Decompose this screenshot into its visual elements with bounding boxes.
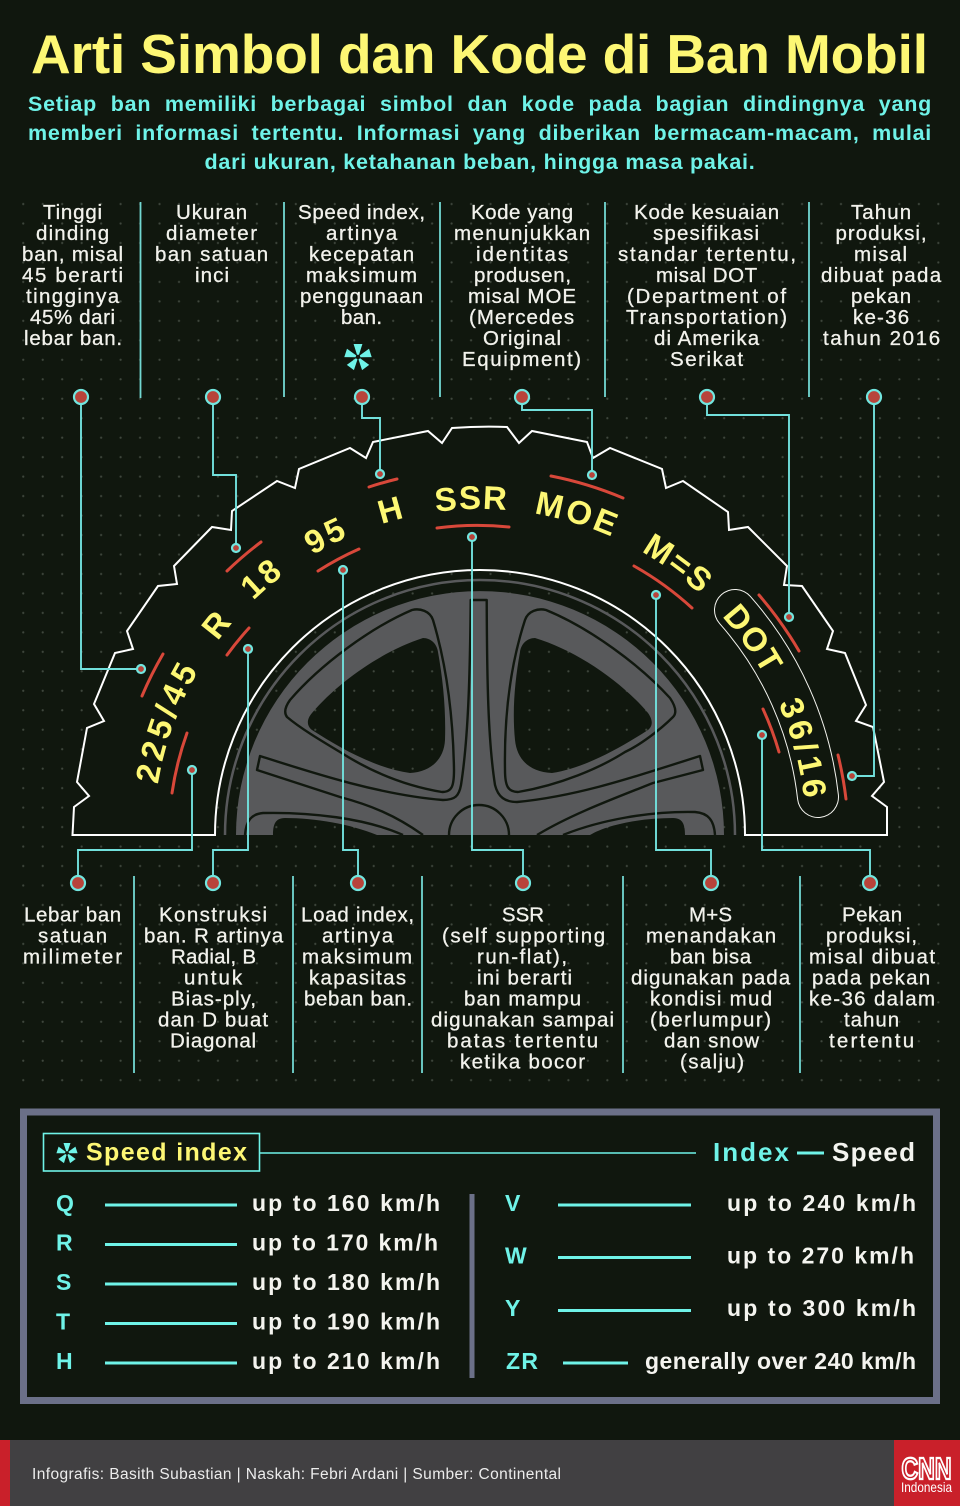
connector pins [71, 390, 881, 890]
top text: wall height: tingginya [26, 285, 120, 308]
right speed rows: Y [505, 1295, 520, 1321]
bottom text: SSR: SSR [502, 904, 544, 926]
bottom text: SSR [431, 904, 615, 1074]
bottom text: M+S: menandakan [646, 924, 777, 948]
bottom text: M+S: digunakan pada [631, 966, 791, 990]
bottom text: SSR: run-flat), [477, 946, 568, 968]
bottom text: M+S: (salju) [680, 1050, 745, 1074]
column divider [470, 1194, 474, 1378]
left speed rows: R [56, 1230, 73, 1256]
left speed rows: up to 160 km/h [252, 1190, 440, 1216]
left speed rows: up to 180 km/h [252, 1269, 440, 1295]
right speed rows: up to 300 km/h [727, 1295, 916, 1321]
bottom text: load index: beban ban. [304, 988, 413, 1010]
left speed rows [56, 1190, 440, 1374]
top text: production year: Tahun [851, 201, 912, 224]
bottom text: production week: ke-36 dalam [809, 988, 936, 1010]
tire sidewall codes: H [378, 496, 402, 524]
left speed rows: S [56, 1269, 71, 1295]
bottom text: load index [301, 904, 415, 1010]
bottom text: SSR: digunakan sampai [431, 1008, 615, 1032]
left speed rows: up to 210 km/h [252, 1348, 440, 1374]
top text: speed index: maksimum [306, 264, 418, 287]
bottom text: width: Lebar ban [24, 904, 122, 926]
top text: wall height: ban, misal [22, 243, 124, 266]
top text: DOT: Transportation) [626, 306, 788, 329]
column legend [713, 1137, 915, 1167]
top text: manufacturer code: Kode yang [471, 201, 574, 224]
top text: production year: tahun 2016 [823, 327, 941, 350]
top text: DOT: Kode kesuaian [634, 201, 780, 224]
top text: manufacturer code: (Mercedes [469, 306, 575, 329]
top text: speed index: Speed index, [298, 201, 426, 224]
top text: manufacturer code: misal MOE [468, 285, 577, 308]
logo: CNN Indonesia [894, 1440, 960, 1506]
right speed rows [505, 1190, 916, 1374]
tire sidewall codes: M=S [643, 533, 711, 591]
footer credits: Infografis: Basith Subastian | Naskah: Febri Ardani | Sumber: Continental [32, 1466, 561, 1483]
top text: production year: produksi, [836, 222, 928, 245]
top text: wall height: lebar ban. [24, 327, 123, 350]
speed index heading [44, 1134, 260, 1171]
top text: speed index [298, 201, 426, 329]
bottom text: production week: produksi, [826, 924, 918, 948]
bottom text: SSR: ketika bocor [460, 1050, 586, 1074]
left speed rows: up to 190 km/h [252, 1308, 440, 1334]
bottom connector lines [78, 537, 870, 883]
intro line 2: memberi informasi tertentu. Informasi yang diberikan bermacam-macam, mulai [28, 121, 932, 145]
panel: speed index table [24, 1112, 936, 1400]
top text: wall height: 45 berarti [22, 264, 124, 287]
top connector lines [81, 397, 874, 776]
speed index heading: Speed index [86, 1138, 247, 1166]
top text: DOT: misal DOT [656, 264, 758, 287]
bottom text: M+S: dan snow [664, 1030, 760, 1052]
bottom text: width: milimeter [23, 946, 123, 968]
bottom text: construction: dan D buat [158, 1008, 269, 1032]
bottom text: SSR: ini berarti [477, 966, 573, 990]
tire sidewall codes: SSR [436, 486, 506, 512]
bottom text: production week [809, 904, 936, 1052]
bottom text: production week: pada pekan [812, 966, 931, 990]
top text: manufacturer code [454, 201, 591, 371]
bottom text: SSR: ban mampu [464, 988, 582, 1010]
bottom text: M+S: (berlumpur) [650, 1008, 772, 1032]
bottom text: construction: Bias-ply, [171, 988, 257, 1010]
column legend: Speed [832, 1137, 915, 1167]
left speed rows: H [56, 1348, 73, 1374]
bottom text: load index: maksimum [302, 946, 413, 968]
red marker arcs [142, 476, 846, 799]
bottom text: SSR: batas tertentu [447, 1030, 599, 1052]
top text: production year: misal [854, 243, 908, 266]
tire sidewall codes [136, 486, 826, 796]
bottom text: production week: tahun [844, 1008, 900, 1032]
top text: production year [821, 201, 942, 350]
bottom text: M+S: kondisi mud [650, 988, 773, 1010]
footer [0, 1440, 960, 1506]
tire sidewall codes: 36/16 [780, 698, 826, 796]
top text: DOT: standar tertentu, [618, 243, 797, 266]
top column dividers [140, 202, 809, 398]
bottom text: load index: artinya [322, 924, 394, 948]
top text: manufacturer code: Equipment) [462, 348, 582, 371]
top text: manufacturer code: produsen, [474, 264, 572, 287]
right speed rows: V [505, 1190, 521, 1216]
bottom text: construction [144, 904, 284, 1052]
tire outline [72, 427, 887, 835]
capsule around DOT code [735, 610, 818, 797]
right speed rows: generally over 240 km/h [645, 1348, 916, 1374]
bottom text: load index: kapasitas [309, 966, 407, 990]
bottom text: production week: tertentu [829, 1030, 915, 1052]
icon: asterisk [344, 344, 372, 370]
bottom text: M+S: ban bisa [670, 946, 752, 968]
left speed rows: up to 170 km/h [252, 1230, 438, 1256]
right speed rows: ZR [506, 1348, 538, 1374]
bottom column dividers [134, 876, 800, 1073]
top text: manufacturer code: identitas [476, 243, 569, 266]
logo: CNN Indonesia: Indonesia [901, 1479, 952, 1495]
left speed rows: T [56, 1308, 70, 1334]
top text: speed index: ban. [341, 306, 383, 329]
top text: production year: pekan [851, 285, 912, 308]
left speed rows: Q [56, 1190, 74, 1216]
top text: DOT: spesifikasi [653, 222, 760, 245]
tire sidewall codes: 18 [242, 560, 280, 600]
top text: diameter: diameter [166, 222, 258, 245]
top text: diameter: ban satuan [155, 243, 269, 266]
top text: production year: ke-36 [853, 306, 910, 329]
right speed rows: up to 240 km/h [727, 1190, 916, 1216]
top text: diameter: inci [195, 264, 230, 287]
top text: diameter [155, 201, 269, 287]
bottom text: construction: ban. R artinya [144, 924, 284, 948]
tire sidewall codes: 95 [304, 517, 344, 552]
bottom text: M+S: M+S [689, 904, 733, 926]
tire sidewall codes: R [201, 612, 232, 640]
bottom text: load index: Load index, [301, 904, 415, 926]
top text: wall height: 45% dari [30, 306, 116, 329]
top text: wall height [22, 201, 124, 350]
top text: manufacturer code: Original [483, 327, 562, 350]
top text: DOT: (Department of [627, 285, 787, 308]
top text: speed index: kecepatan [309, 243, 415, 266]
bottom text: production week: misal dibuat [809, 946, 936, 968]
bottom text: SSR: (self supporting [442, 924, 606, 948]
top text: DOT [618, 201, 797, 371]
wheel spoke lines [245, 600, 715, 835]
column legend: Index [713, 1137, 790, 1167]
header rule [260, 1152, 696, 1154]
right speed rows: W [505, 1242, 527, 1268]
top text: production year: dibuat pada [821, 264, 942, 287]
tire sidewall codes: MOE [536, 491, 618, 536]
bottom text: construction: Konstruksi [159, 904, 268, 926]
title: Arti Simbol dan Kode di Ban Mobil [31, 23, 928, 85]
bottom text: width: satuan [38, 924, 108, 948]
intro line 3: dari ukuran, ketahanan beban, hingga masa pakai. [205, 150, 755, 174]
top text: wall height: Tinggi [43, 201, 103, 224]
bottom text: construction: Diagonal [170, 1030, 257, 1052]
bottom text: width [23, 904, 123, 968]
top text: speed index: penggunaan [300, 285, 424, 308]
bottom text: M+S [631, 904, 791, 1074]
wheel rim [224, 578, 736, 835]
bottom text: construction: Radial, B [171, 946, 257, 968]
tire sidewall codes: DOT [723, 603, 784, 668]
top text: wall height: dinding [36, 222, 110, 245]
bottom text: construction: untuk [184, 966, 243, 990]
intro line 1: Setiap ban memiliki berbagai simbol dan kode pada bagian dindingnya yang [28, 92, 932, 116]
top text: speed index: artinya [326, 222, 398, 245]
tire sidewall codes: 225/45 [136, 662, 196, 784]
top text: DOT: Serikat [670, 348, 744, 371]
bottom text: production week: Pekan [842, 904, 903, 926]
top text: manufacturer code: menunjukkan [454, 222, 591, 245]
top text: diameter: Ukuran [176, 201, 248, 224]
right speed rows: up to 270 km/h [727, 1242, 914, 1268]
top text: DOT: di Amerika [654, 327, 760, 350]
